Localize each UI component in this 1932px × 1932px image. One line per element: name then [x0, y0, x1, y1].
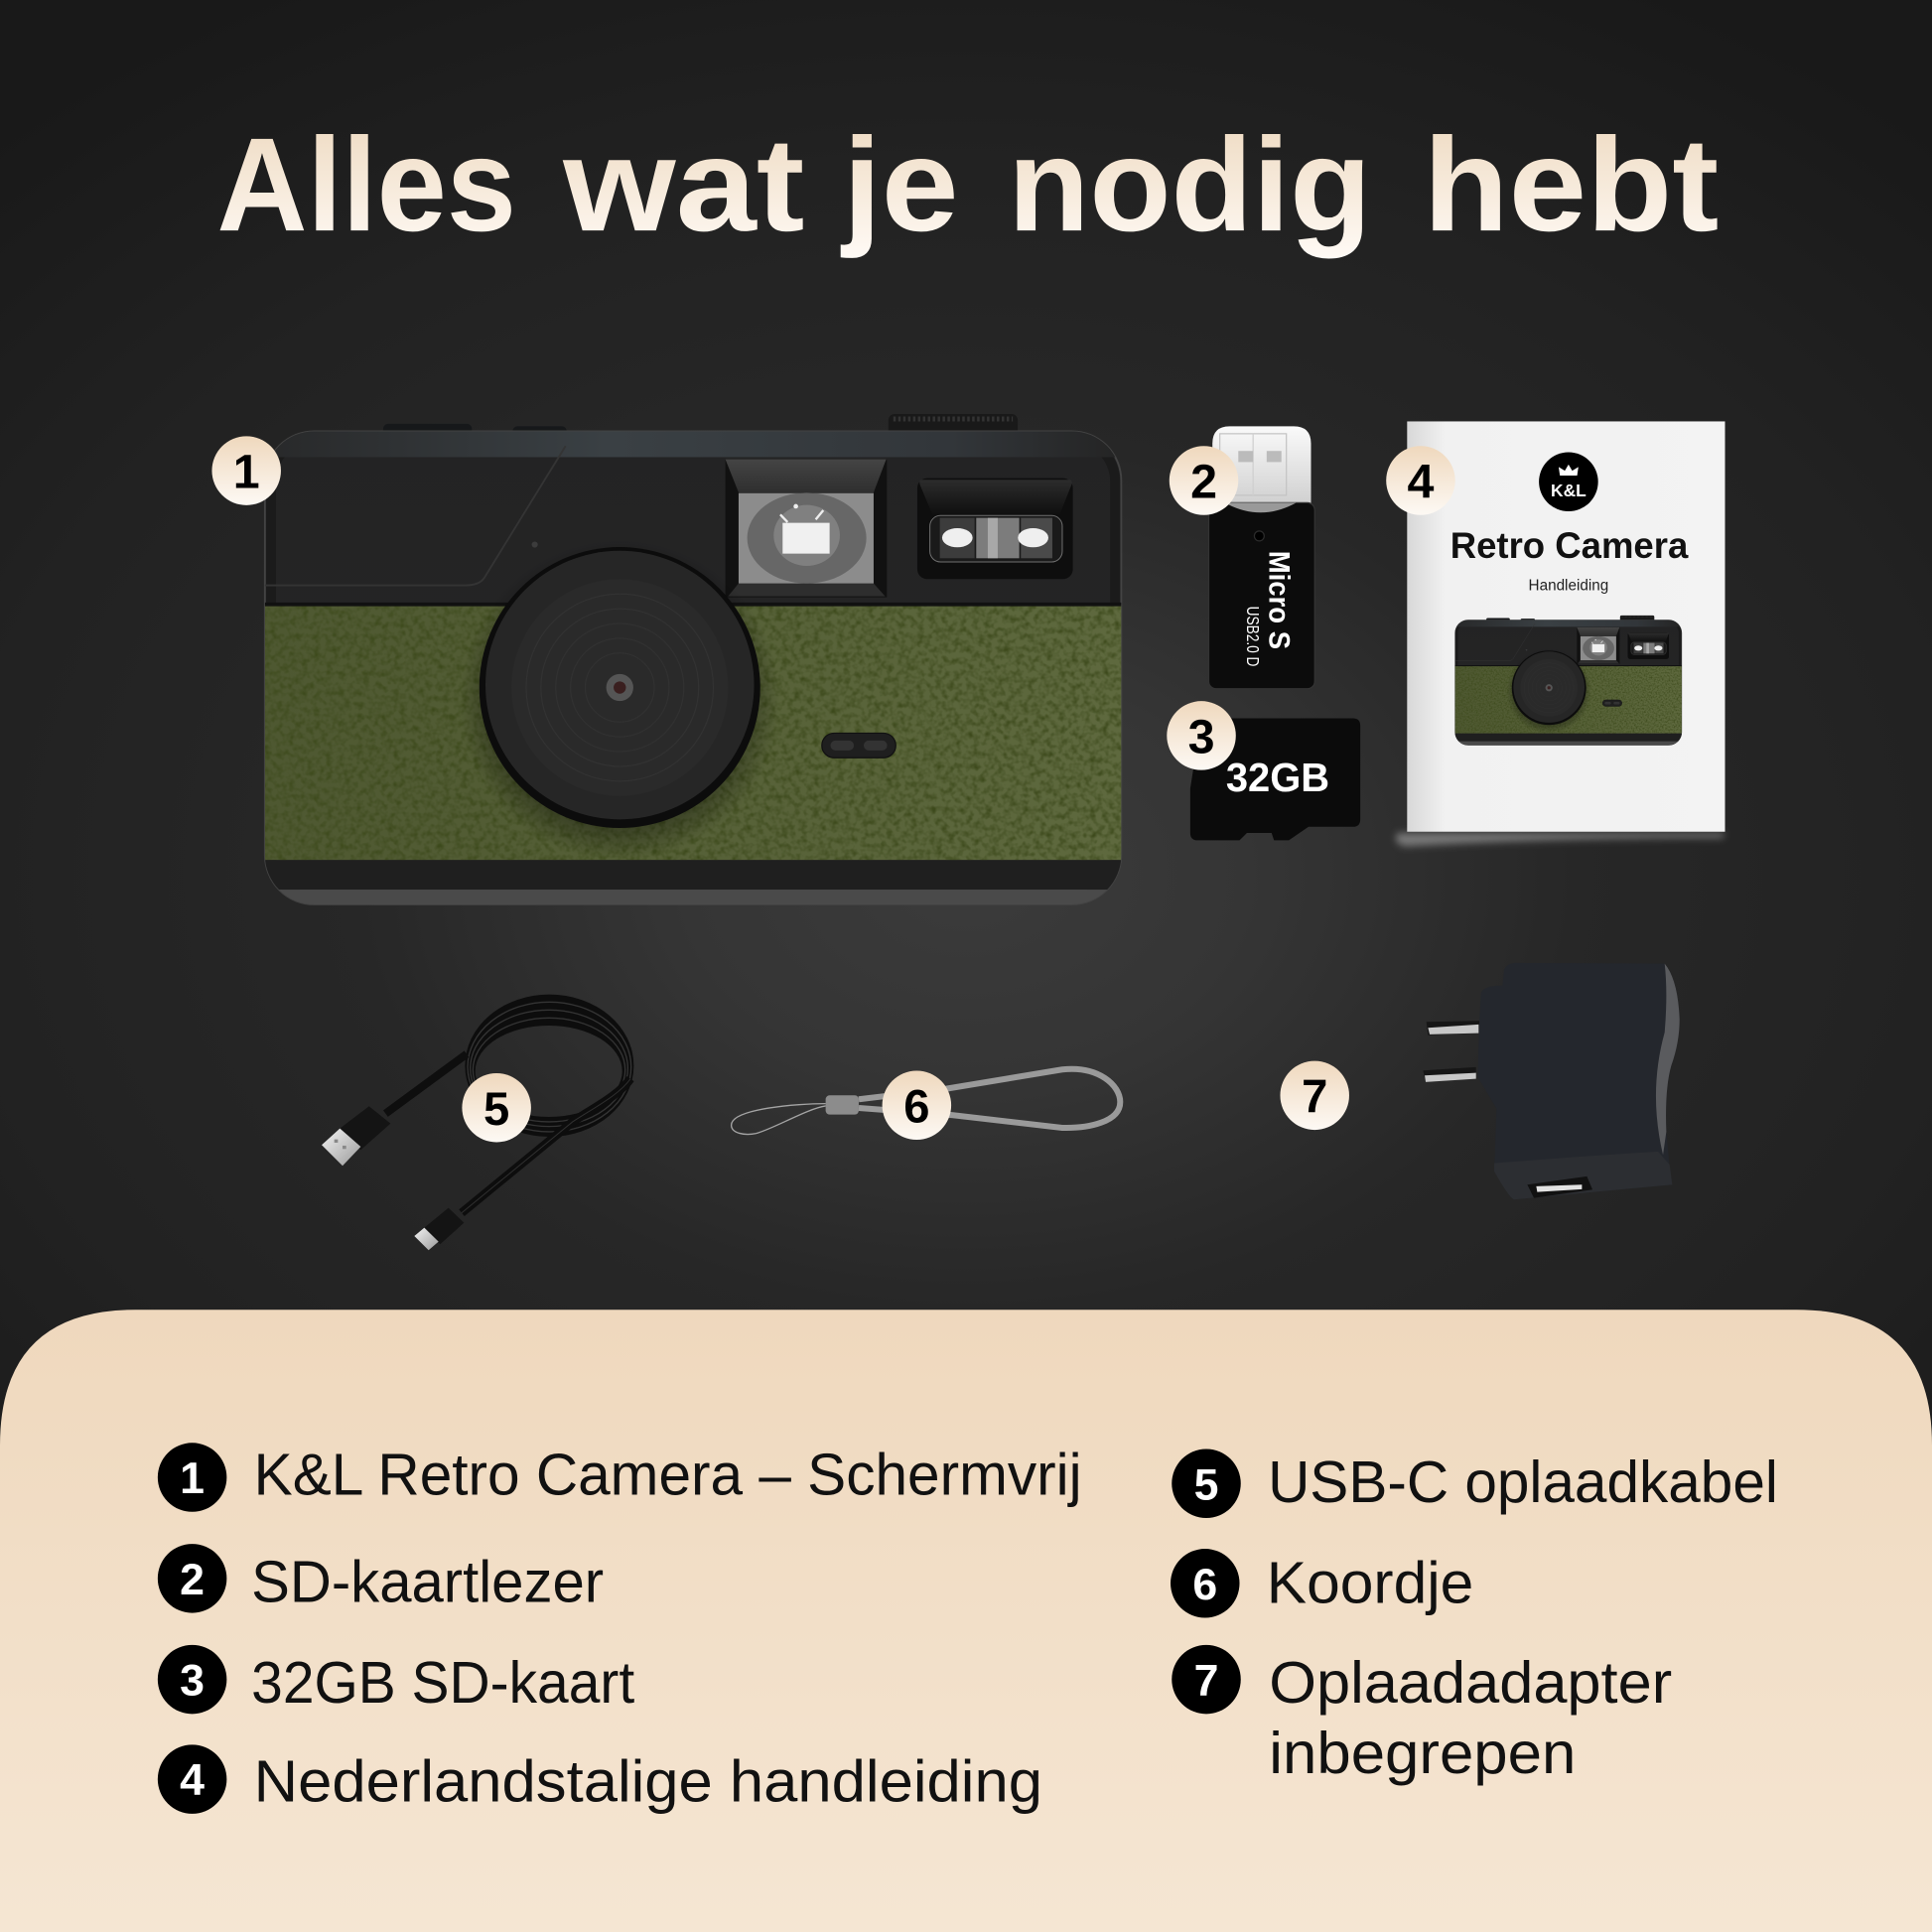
badge 4 — [1386, 446, 1455, 515]
power adapter — [1423, 963, 1680, 1199]
wrist strap — [732, 1069, 1120, 1134]
lens — [480, 547, 760, 828]
adapter body — [1477, 963, 1680, 1199]
badge 7 — [1280, 1061, 1349, 1130]
manual subtitle: Handleiding — [1529, 576, 1608, 594]
camera body — [265, 431, 1121, 904]
strap loop — [859, 1069, 1120, 1128]
cable coil — [465, 995, 633, 1137]
list item 6: 6 — [1192, 1561, 1217, 1609]
badge 5 — [462, 1073, 531, 1142]
microSD card — [1190, 719, 1360, 840]
badge 2: 2 — [1190, 455, 1217, 508]
badge 3: 3 — [1188, 710, 1215, 763]
list item 2: 2 — [180, 1556, 205, 1604]
camera buttons — [383, 424, 567, 436]
adapter bottom band — [1494, 1152, 1672, 1199]
manual shadow — [1396, 833, 1725, 847]
manual — [1396, 421, 1725, 847]
reader hole — [1254, 531, 1264, 541]
list item 4: Nederlandstalige handleiding — [254, 1747, 1042, 1814]
logo — [1539, 452, 1598, 511]
adapter side highlight — [1656, 964, 1680, 1155]
badge 5: 5 — [483, 1082, 509, 1135]
USB plug — [1220, 434, 1287, 495]
badge 2 — [1170, 446, 1238, 515]
manual page — [1407, 421, 1725, 832]
title: je — [840, 111, 959, 259]
list item 6: Koordje — [1267, 1550, 1473, 1616]
door line — [265, 446, 566, 586]
badge 3 — [1167, 701, 1236, 770]
camera body details — [265, 431, 1121, 904]
title: Alles — [216, 111, 516, 259]
camera bottom edge — [265, 890, 1121, 904]
list item 6 — [1171, 1549, 1473, 1618]
viewfinder — [726, 460, 887, 598]
microSD card: 32GB — [1226, 755, 1329, 800]
reader label: Micro S — [1262, 551, 1295, 649]
reader tab — [1225, 502, 1297, 512]
list item 7: 7 — [1194, 1657, 1218, 1706]
rangefinder window — [917, 479, 1073, 579]
badge 7: 7 — [1302, 1070, 1327, 1123]
USB-C lead — [462, 1079, 630, 1213]
speaker — [822, 733, 896, 758]
bottom panel — [0, 1310, 1932, 1932]
adapter USB port — [1527, 1176, 1592, 1198]
title — [216, 111, 1719, 259]
manual camera image — [1455, 616, 1682, 746]
list item 7: inbegrepen — [1269, 1720, 1576, 1786]
strap slider — [826, 1095, 859, 1115]
title: hebt — [1423, 111, 1719, 259]
badge 1: 1 — [233, 445, 260, 498]
reader cap — [1212, 426, 1311, 504]
manual title: Retro Camera — [1450, 524, 1689, 566]
lens shadow — [460, 540, 780, 860]
USB-C connector — [414, 1208, 464, 1250]
list item 5: 5 — [1194, 1460, 1218, 1509]
list item 4: 4 — [180, 1756, 205, 1805]
leather band — [265, 605, 1121, 860]
adapter prongs — [1423, 1021, 1479, 1082]
badge 6 — [883, 1070, 951, 1140]
badge 1 — [211, 436, 281, 505]
list item 3: 3 — [180, 1657, 205, 1706]
camera — [265, 414, 1121, 904]
USB-A lead — [385, 1054, 467, 1114]
sensor dot — [532, 541, 538, 548]
reader sublabel: USB2.0 D — [1243, 607, 1263, 666]
USB-A connector — [322, 1106, 390, 1166]
list item 7: Oplaadadapter — [1269, 1649, 1672, 1716]
strap thin loop — [732, 1104, 826, 1134]
list item 3: 32GB SD-kaart — [251, 1649, 635, 1716]
leather top shadow — [265, 603, 1121, 607]
badge 4: 4 — [1407, 455, 1434, 508]
SD card reader — [1208, 426, 1314, 689]
list item 2: SD-kaartlezer — [251, 1548, 604, 1614]
camera dial — [889, 414, 1018, 436]
title: wat — [562, 111, 804, 259]
title: nodig — [1008, 111, 1371, 259]
body edge shading — [266, 457, 1682, 665]
list item 1: 1 — [180, 1454, 205, 1503]
logo: K&L — [1551, 481, 1587, 500]
camera top edge — [265, 431, 1121, 457]
badge 6: 6 — [903, 1080, 929, 1133]
list item 1: K&L Retro Camera – Schermvrij — [254, 1441, 1082, 1507]
lower black band — [265, 860, 1121, 890]
USB-C cable — [322, 995, 633, 1250]
list item 7 — [1172, 1645, 1672, 1786]
list item 5: USB-C oplaadkabel — [1268, 1449, 1778, 1515]
reader body — [1208, 502, 1314, 689]
